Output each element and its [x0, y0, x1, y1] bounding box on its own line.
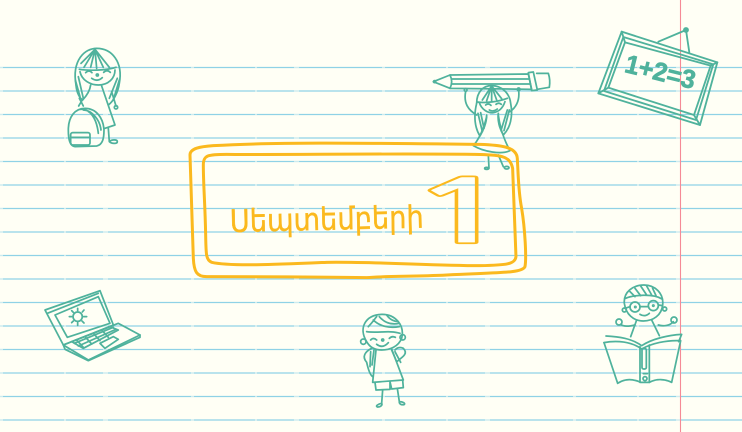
- icon: boy reading a book: [604, 285, 682, 383]
- icon: girl with backpack: [68, 48, 120, 147]
- icon: boy with backpack: [361, 314, 405, 407]
- title frame: [190, 143, 526, 278]
- icon: girl lifting a pencil: [433, 72, 550, 169]
- pencil: [433, 72, 550, 91]
- numeral one: 1: [405, 169, 520, 256]
- sun on screen: [69, 308, 87, 325]
- icon: laptop: [45, 291, 140, 361]
- chalkboard sum: 1+2=3: [622, 48, 699, 95]
- icon: hanging chalkboard: [598, 28, 717, 125]
- title text: Սեպտեմբերի: [229, 200, 424, 240]
